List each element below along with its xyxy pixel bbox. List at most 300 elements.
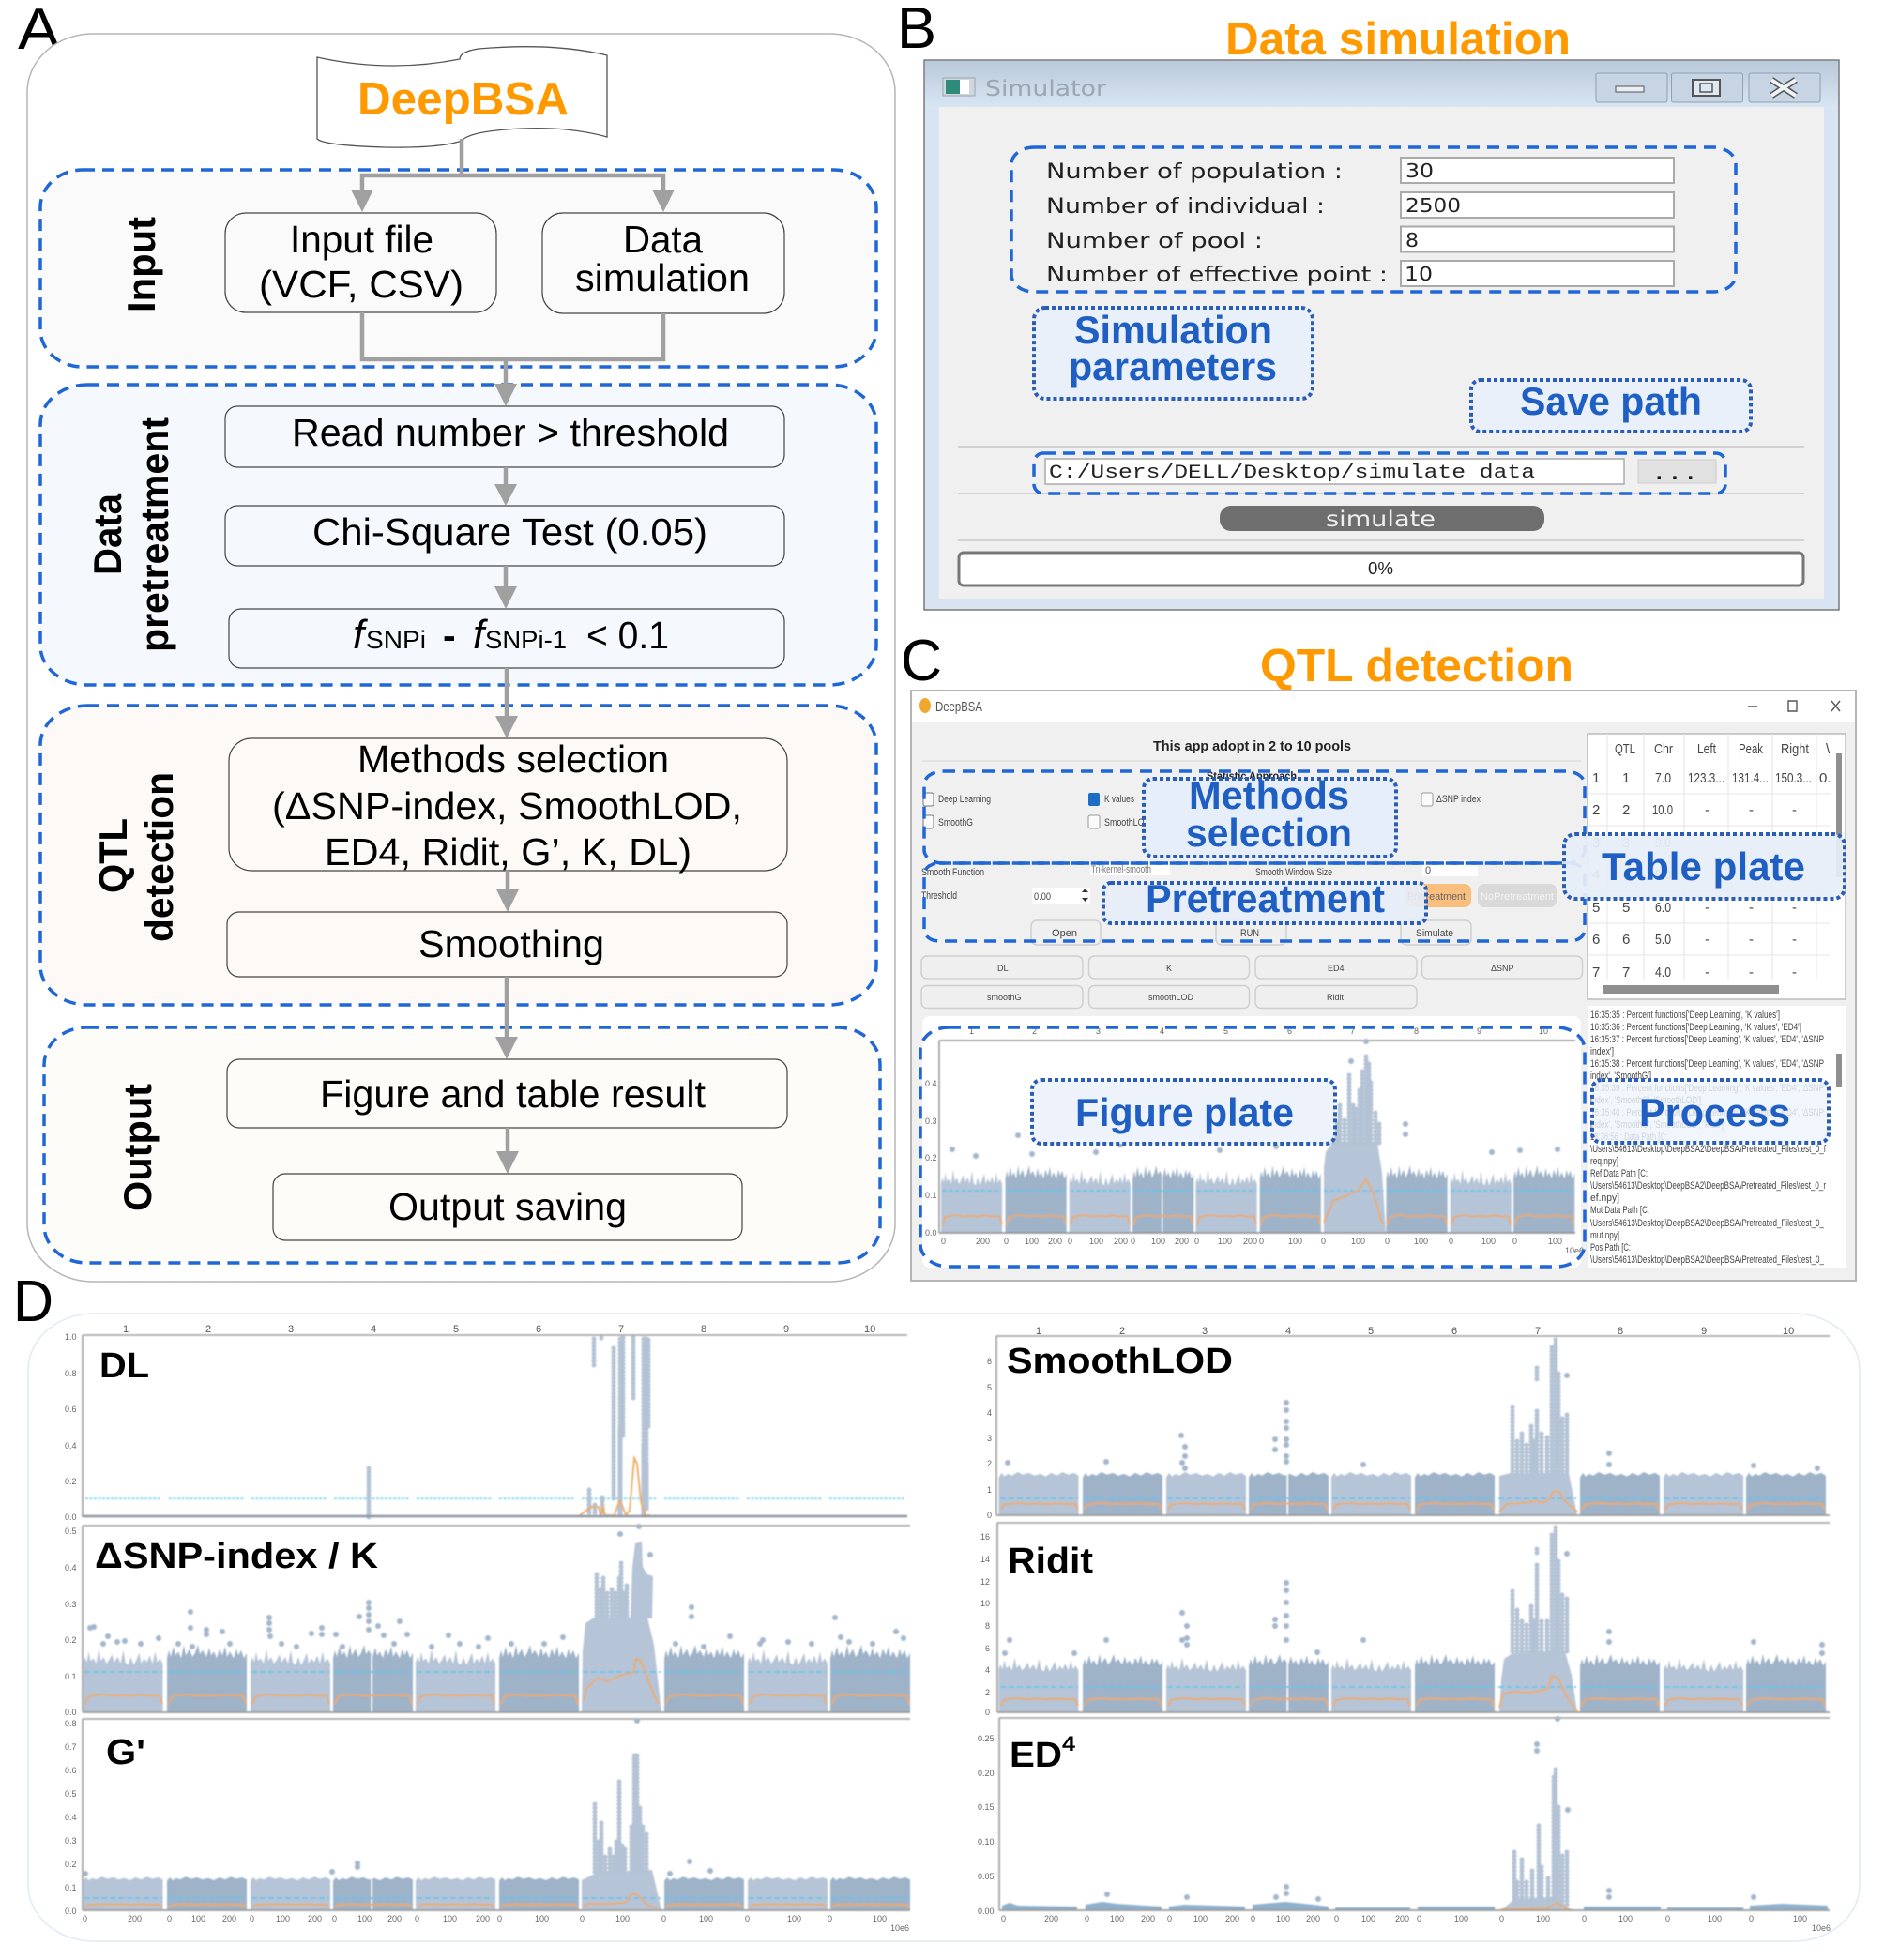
app subtitle: This app adopt in 2 to 10 pools: [1153, 738, 1351, 754]
simulation parameter form: Number of effective point :: [1046, 264, 1388, 287]
progress bar: [959, 553, 1803, 585]
Ridit y axis: [980, 1532, 990, 1717]
simulation parameter form: 30: [1405, 160, 1434, 182]
SmoothLOD axis labels: 3: [987, 1434, 992, 1443]
G' axes: 100: [191, 1914, 205, 1923]
results table: 150.3...: [1775, 770, 1812, 786]
delta SNP y axis: 0.2: [65, 1635, 77, 1645]
figure plate chart: 200: [1243, 1237, 1257, 1246]
chart: SmoothLOD: [987, 1326, 1830, 1520]
title bar: Simulator: [985, 77, 1107, 101]
delta SNP y axis: 0.4: [65, 1563, 77, 1573]
box: figure and table result: Figure and table result: [320, 1072, 706, 1116]
results table: 3: [1622, 835, 1630, 851]
delta SNP y axis: 0.3: [65, 1600, 77, 1609]
box: smoothing: Smoothing: [418, 922, 604, 965]
simulation parameter form: 2500: [1405, 194, 1461, 217]
figure plate chart: 0: [1449, 1237, 1453, 1246]
G' axes: 100: [873, 1914, 887, 1923]
label: Data pretreatment: [85, 417, 176, 652]
G' axes: 100: [443, 1914, 457, 1923]
methods checkboxes: [923, 769, 1481, 828]
process log: 16:35:35 : Percent functions['Deep Learning', 'K values']: [1590, 1010, 1780, 1021]
chart: ED4: [978, 1718, 1831, 1933]
title bar: [943, 73, 1820, 102]
save path field: C:/Users/DELL/Desktop/simulate_data: [1049, 463, 1535, 484]
Ridit y axis: 4: [985, 1665, 990, 1675]
pretreatment controls: 0: [1425, 865, 1431, 876]
chart: DL: [65, 1324, 907, 1522]
G' axes: 100: [357, 1914, 372, 1923]
figure plate chart: 1: [969, 1026, 974, 1036]
ED4 axes: 0: [1167, 1914, 1172, 1923]
box: methods selection: Methods selection: [357, 737, 669, 781]
ED4 axes: 100: [1454, 1914, 1468, 1923]
results table: 5: [1592, 900, 1600, 916]
figure plate chart: 200: [1114, 1237, 1128, 1246]
results table: 6: [1592, 932, 1600, 948]
DL y axis and chromosome labels: 10: [864, 1324, 875, 1335]
G' axes: 0.5: [65, 1789, 77, 1799]
results table: Chr: [1654, 741, 1673, 757]
ED4 axes: 0: [1499, 1914, 1504, 1923]
SmoothLOD axis labels: 1: [1036, 1326, 1041, 1337]
G' axes: 200: [476, 1914, 490, 1923]
arrow: figure to output saving: [496, 1128, 519, 1174]
plot selection buttons: K: [1166, 964, 1172, 973]
figure plate chart: 0.4: [925, 1079, 937, 1088]
SmoothLOD axis labels: 3: [1202, 1326, 1208, 1337]
ED4 axes: 200: [1225, 1914, 1239, 1923]
ED4 axes: 0.05: [978, 1872, 995, 1881]
group: input: [40, 170, 876, 367]
ED4 axes: 100: [1276, 1914, 1290, 1923]
panel D: comparison of methods: [28, 1314, 1860, 1941]
SmoothLOD axis labels: 8: [1618, 1326, 1623, 1337]
ED4 axes: 0.10: [978, 1837, 995, 1846]
figure plate chart: 10e6: [1565, 1246, 1584, 1255]
label: ED4: 4: [1062, 1732, 1076, 1755]
SmoothLOD axis labels: 2: [987, 1459, 992, 1468]
ED4 axes: 0: [1749, 1914, 1754, 1923]
panel C: DeepBSA app window: [911, 691, 1856, 1281]
results table: -: [1792, 965, 1797, 980]
G' axes: 0: [167, 1914, 172, 1923]
panel B: simulator window: [924, 60, 1839, 610]
arrow: smoothing to figure: [495, 977, 518, 1059]
simulation parameter form: [1011, 147, 1736, 292]
results table: -: [1792, 802, 1797, 818]
figure plate chart: 0: [1385, 1237, 1390, 1246]
results table: \: [1826, 741, 1831, 757]
callout: save path: Save path: [1520, 379, 1702, 423]
callout region: figure plate: Figure plate: [1075, 1090, 1294, 1134]
process log: Pos Path [C:: [1590, 1242, 1631, 1253]
simulation parameter form: Number of pool :: [1046, 230, 1263, 253]
DL y axis and chromosome labels: 0.0: [65, 1512, 77, 1522]
label: Output: Output: [115, 1084, 160, 1211]
results table: 4: [1592, 867, 1600, 883]
box: f SNP filter: SNPi-1: [485, 626, 567, 654]
G' axes: 200: [308, 1914, 322, 1923]
figure plate chart: 100: [1089, 1237, 1103, 1246]
DL y axis and chromosome labels: 0.2: [65, 1477, 77, 1486]
figure plate chart: 100: [1218, 1237, 1232, 1246]
results table: 2: [1622, 802, 1630, 818]
G' axes: 0.2: [65, 1860, 77, 1869]
figure plate chart: 100: [1351, 1237, 1365, 1246]
group: output: [44, 1027, 880, 1263]
G' axes: 200: [387, 1914, 402, 1923]
callout: process: Process: [1639, 1090, 1790, 1134]
delta SNP y axis: 0.5: [65, 1527, 77, 1536]
G' axes: 0: [332, 1914, 337, 1923]
ED4 axes: 200: [1306, 1914, 1320, 1923]
figure plate chart: 2: [1032, 1026, 1037, 1036]
pretreatment controls: NoPretreatment: [1481, 891, 1554, 903]
ED4 axes: 200: [1044, 1914, 1058, 1923]
results table: [1588, 734, 1846, 999]
methods checkboxes: SmoothLOD: [1104, 817, 1150, 828]
box: read number: [225, 406, 784, 467]
ED4 axes: 0: [1334, 1914, 1339, 1923]
results table: 6.0: [1655, 900, 1671, 916]
simulation parameter form: Number of individual :: [1046, 195, 1325, 219]
results table: -: [1792, 932, 1797, 948]
SmoothLOD axis labels: 6: [1451, 1326, 1457, 1337]
figure plate chart: 0: [1194, 1237, 1199, 1246]
box: smoothing: [227, 912, 787, 977]
G' axes: 0.4: [65, 1813, 77, 1822]
pretreatment controls: Pretreatment: [1407, 891, 1466, 903]
ED4 axes: 0: [1085, 1914, 1089, 1923]
pretreatment controls: Simulate: [1416, 928, 1453, 939]
G' axes: 0: [580, 1914, 585, 1923]
label: G': G': [106, 1733, 145, 1772]
DL y axis and chromosome labels: 5: [453, 1324, 459, 1335]
DL y axis and chromosome labels: 6: [536, 1324, 541, 1335]
G' axes: 0: [415, 1914, 419, 1923]
SmoothLOD axis labels: 0: [987, 1511, 992, 1520]
ED4 axes: 0: [1001, 1914, 1006, 1923]
plot selection buttons: smoothG: [987, 993, 1022, 1002]
box: read number: Read number > threshold: [292, 411, 729, 454]
G' axes: 100: [699, 1914, 713, 1923]
callout: table plate: [1564, 834, 1845, 899]
pretreatment controls: 0.00: [1034, 891, 1051, 903]
label: Input: Input: [119, 217, 163, 312]
label: Ridit: Ridit: [1008, 1542, 1093, 1581]
box: f SNP filter: -: [443, 614, 456, 657]
process log: mut.npy]: [1590, 1230, 1619, 1241]
label: Data pretreatment: pretreatment: [132, 417, 176, 652]
figure plate chart: 6: [1287, 1026, 1292, 1036]
G' axes: 0: [661, 1914, 666, 1923]
label: QTL detection: [91, 772, 181, 942]
methods checkboxes: Statistic Approach: [1207, 769, 1297, 782]
box: input file: Input file: [290, 218, 433, 261]
G' axes: 200: [222, 1914, 236, 1923]
box: f SNP filter: < 0.1: [586, 614, 669, 657]
label: QTL detection: detection: [137, 772, 181, 942]
process log: Mut Data Path [C:: [1590, 1205, 1649, 1216]
pretreatment controls: RUN: [1240, 928, 1259, 939]
G' axes: 0.7: [65, 1742, 77, 1752]
process log: index', 'SmoothG', 'SmoothLOD', 'Ridit']: [1590, 1119, 1724, 1131]
Ridit y axis: 8: [985, 1621, 990, 1631]
label: DL: DL: [99, 1346, 149, 1386]
label: ED4: [1010, 1732, 1076, 1775]
Ridit y axis: 12: [980, 1577, 990, 1587]
figure plate chart: 100: [1025, 1237, 1039, 1246]
ED4 axes: 0: [1417, 1914, 1421, 1923]
simulate button: [1220, 506, 1544, 532]
G' axes: [65, 1719, 909, 1933]
chart: Ridit: [980, 1523, 1830, 1717]
Ridit y axis: 6: [985, 1644, 990, 1653]
chart: G': [65, 1719, 910, 1933]
callout region: methods selection: Methods: [1189, 773, 1349, 817]
SmoothLOD axis labels: 4: [987, 1408, 992, 1418]
ED4 axes: 0: [1251, 1914, 1255, 1923]
box: f SNP filter: f: [473, 612, 489, 658]
methods checkboxes: Ridit: [1270, 817, 1286, 828]
figure plate chart: 0.2: [925, 1153, 937, 1162]
label: SmoothLOD: SmoothLOD: [1007, 1342, 1233, 1381]
heading: Data simulation: Data simulation: [1225, 14, 1571, 65]
callout: simulation parameters: [1034, 308, 1313, 399]
box: data simulation: simulation: [575, 256, 750, 299]
group: QTL detection: [40, 706, 876, 1005]
pretreatment controls: Open: [1052, 928, 1077, 939]
SmoothLOD axis labels: 4: [1285, 1326, 1291, 1337]
box: f SNP filter: [229, 609, 784, 668]
callout region: pretreatment: [924, 863, 1585, 941]
label: Data pretreatment: Data: [85, 493, 129, 575]
ED4 axes: 100: [1618, 1914, 1633, 1923]
plot selection buttons: ED4: [1328, 964, 1345, 973]
figure plate chart: 0: [1321, 1237, 1326, 1246]
box: input file: (VCF, CSV): [259, 263, 463, 306]
figure plate chart: 9: [1477, 1026, 1481, 1036]
DL y axis and chromosome labels: 0.8: [65, 1369, 77, 1378]
process log: 16:36:56 : Data Path [C:: [1590, 1132, 1667, 1143]
callout region: pretreatment: Pretreatment: [1146, 876, 1385, 920]
figure plate chart: 8: [1414, 1026, 1419, 1036]
box: methods selection: ED4, Ridit, G’, K, DL): [325, 830, 691, 874]
ED4 axes: 0: [1582, 1914, 1587, 1923]
box: chi-square test: Chi-Square Test (0.05): [312, 510, 707, 554]
results table: 7.0: [1655, 770, 1671, 786]
ED4 axes: 0.15: [978, 1802, 995, 1812]
results table: -: [1749, 965, 1754, 980]
ED4 axes: 0.25: [978, 1734, 995, 1743]
figure plate chart: 100: [1481, 1237, 1496, 1246]
process log: index', 'SmoothG', 'SmoothLOD']: [1590, 1095, 1701, 1106]
DL y axis and chromosome labels: 0.4: [65, 1441, 77, 1451]
DeepBSA document shape: [317, 47, 607, 147]
SmoothLOD axis labels: 10: [1783, 1326, 1794, 1337]
G' axes: 0.6: [65, 1766, 77, 1775]
G' axes: 0: [828, 1914, 832, 1923]
results table: 4: [1622, 867, 1630, 883]
figure plate chart: 100: [1548, 1237, 1562, 1246]
SmoothLOD axis labels: 1: [987, 1485, 992, 1495]
figure plate chart: 0: [1131, 1237, 1135, 1246]
SmoothLOD axis labels: 6: [987, 1357, 992, 1366]
pretreatment controls: [921, 860, 1557, 945]
figure plate chart: 5: [1223, 1026, 1228, 1036]
ED4 axes: 0: [1665, 1914, 1670, 1923]
results table: 1: [1622, 770, 1630, 786]
DeepBSA document shape: DeepBSA: [357, 74, 569, 125]
plot selection buttons: ΔSNP: [1491, 964, 1514, 973]
SmoothLOD axis labels: 5: [1368, 1326, 1374, 1337]
results table: 3: [1592, 835, 1600, 851]
results table: Right: [1781, 741, 1810, 757]
pretreatment controls: Smooth Function: [921, 867, 984, 878]
results table: 131.4...: [1732, 770, 1769, 786]
figure plate chart: [922, 1016, 1584, 1268]
box: methods selection: (ΔSNP-index, SmoothLOD,: [272, 784, 742, 828]
Ridit y axis: 16: [980, 1532, 990, 1542]
Ridit y axis: 10: [980, 1599, 990, 1608]
ED4 axes: 100: [1361, 1914, 1375, 1923]
chart: delta SNP-index / K: [65, 1526, 910, 1717]
callout: simulation parameters: parameters: [1069, 344, 1277, 388]
methods checkboxes: ΔSNP index: [1436, 794, 1481, 805]
box: methods selection: [229, 737, 787, 874]
panel letter D: D: [13, 1269, 53, 1334]
ED4 axes: 100: [1793, 1914, 1807, 1923]
box: f SNP filter: f: [353, 612, 369, 658]
pretreatment controls: Smooth Window Size: [1255, 867, 1332, 878]
app title bar: DeepBSA: [935, 699, 982, 715]
box: f SNP filter: SNPi: [366, 626, 426, 654]
SmoothLOD axis labels: 7: [1535, 1326, 1541, 1337]
DL y axis and chromosome labels: 4: [371, 1324, 376, 1335]
arrows: DeepBSA to input: [351, 139, 675, 212]
plot selection buttons: smoothLOD: [1148, 993, 1194, 1002]
SmoothLOD axis labels: 5: [987, 1383, 992, 1392]
G' axes: 100: [615, 1914, 630, 1923]
label: delta SNP-index / K: ΔSNP-index / K: [95, 1537, 379, 1576]
SmoothLOD axis labels: 9: [1701, 1326, 1707, 1337]
ED4 axes: 100: [1110, 1914, 1124, 1923]
ED4 axes: 10e6: [1812, 1923, 1831, 1933]
delta SNP y axis: [65, 1527, 77, 1717]
results table: Left: [1697, 741, 1717, 757]
results table: -: [1705, 965, 1709, 980]
results table: -: [1749, 802, 1754, 818]
callout: save path: [1471, 379, 1751, 432]
arrow: methods to smoothing: [496, 871, 519, 912]
ED4 axes: 0.00: [978, 1907, 995, 1916]
box: data simulation: Data: [623, 218, 703, 261]
DL y axis and chromosome labels: 7: [618, 1324, 624, 1335]
results table: 7: [1622, 965, 1630, 980]
figure plate chart: 0: [1004, 1237, 1009, 1246]
G' axes: 200: [128, 1914, 142, 1923]
G' axes: 10e6: [890, 1923, 909, 1933]
results table: 0.: [1819, 770, 1831, 786]
simulation parameter form: 8: [1405, 229, 1419, 251]
process log: index', 'SmoothG']: [1590, 1071, 1651, 1082]
box: output saving: [273, 1174, 742, 1240]
SmoothLOD axis labels: 2: [1119, 1326, 1125, 1337]
figure plate chart: 3: [1096, 1026, 1101, 1036]
results table: 123.3...: [1688, 770, 1724, 786]
results table: -: [1705, 932, 1709, 948]
label: QTL detection: QTL: [91, 818, 135, 893]
figure plate chart: 200: [1048, 1237, 1062, 1246]
results table: 9.0: [1655, 835, 1671, 851]
callout: simulation parameters: Simulation: [1074, 308, 1272, 352]
box: data simulation: [542, 213, 784, 313]
results table: 2: [1592, 802, 1600, 818]
results table: -: [1749, 932, 1754, 948]
process log: 16:35:36 : Percent functions['Deep Learning', 'K values', 'ED4']: [1590, 1022, 1801, 1033]
heading: QTL detection: QTL detection: [1260, 641, 1573, 691]
SmoothLOD axis labels: [987, 1326, 1794, 1520]
figure plate chart: 0: [1259, 1237, 1264, 1246]
DL y axis and chromosome labels: 0.6: [65, 1405, 77, 1414]
pretreatment controls: Threshold: [921, 890, 957, 902]
results table: 5.0: [1655, 932, 1671, 948]
save path field: [1034, 453, 1725, 494]
simulation parameter form: 10: [1405, 263, 1433, 285]
box: chi-square test: [225, 506, 784, 566]
G' axes: 0: [83, 1914, 87, 1923]
methods checkboxes: SmoothG: [938, 817, 973, 828]
box: input file: [225, 213, 496, 312]
G' axes: 0: [745, 1914, 750, 1923]
box: output saving: Output saving: [388, 1185, 627, 1228]
G' axes: 0: [250, 1914, 254, 1923]
results table: -: [1792, 900, 1797, 916]
figure plate chart: 100: [1288, 1237, 1302, 1246]
DL y axis and chromosome labels: 2: [205, 1324, 211, 1335]
panel A: workflow: [27, 34, 895, 1282]
panel letter C: C: [901, 629, 942, 693]
plot selection buttons: Ridit: [1327, 993, 1345, 1002]
figure plate chart: 200: [976, 1237, 990, 1246]
figure plate chart: 0: [1512, 1237, 1517, 1246]
app title bar: [912, 691, 1855, 722]
progress bar: 0%: [1368, 559, 1393, 578]
callout region: methods selection: [924, 771, 1585, 863]
box: figure and table result: [227, 1059, 787, 1128]
ED4 axes: 200: [1141, 1914, 1155, 1923]
figure plate chart: 0.1: [925, 1191, 937, 1200]
group: data pretreatment: [40, 385, 876, 685]
ED4 axes: 0.20: [978, 1769, 995, 1778]
results table: 8.0: [1655, 867, 1671, 883]
callout: process: [1592, 1080, 1829, 1143]
results table: 10.0: [1652, 802, 1673, 818]
G' axes: 0.0: [65, 1907, 77, 1916]
results table: -: [1705, 802, 1709, 818]
ED4 axes: 100: [1708, 1914, 1722, 1923]
ED4 axes: [978, 1734, 1831, 1933]
label: ED4: ED: [1010, 1736, 1062, 1775]
plot selection buttons: DL: [997, 964, 1009, 973]
DL y axis and chromosome labels: [65, 1324, 875, 1522]
save path field: ...: [1656, 460, 1694, 485]
simulate button: simulate: [1326, 508, 1436, 532]
process log: index']: [1590, 1046, 1614, 1057]
figure plate chart: 4: [1160, 1026, 1164, 1036]
